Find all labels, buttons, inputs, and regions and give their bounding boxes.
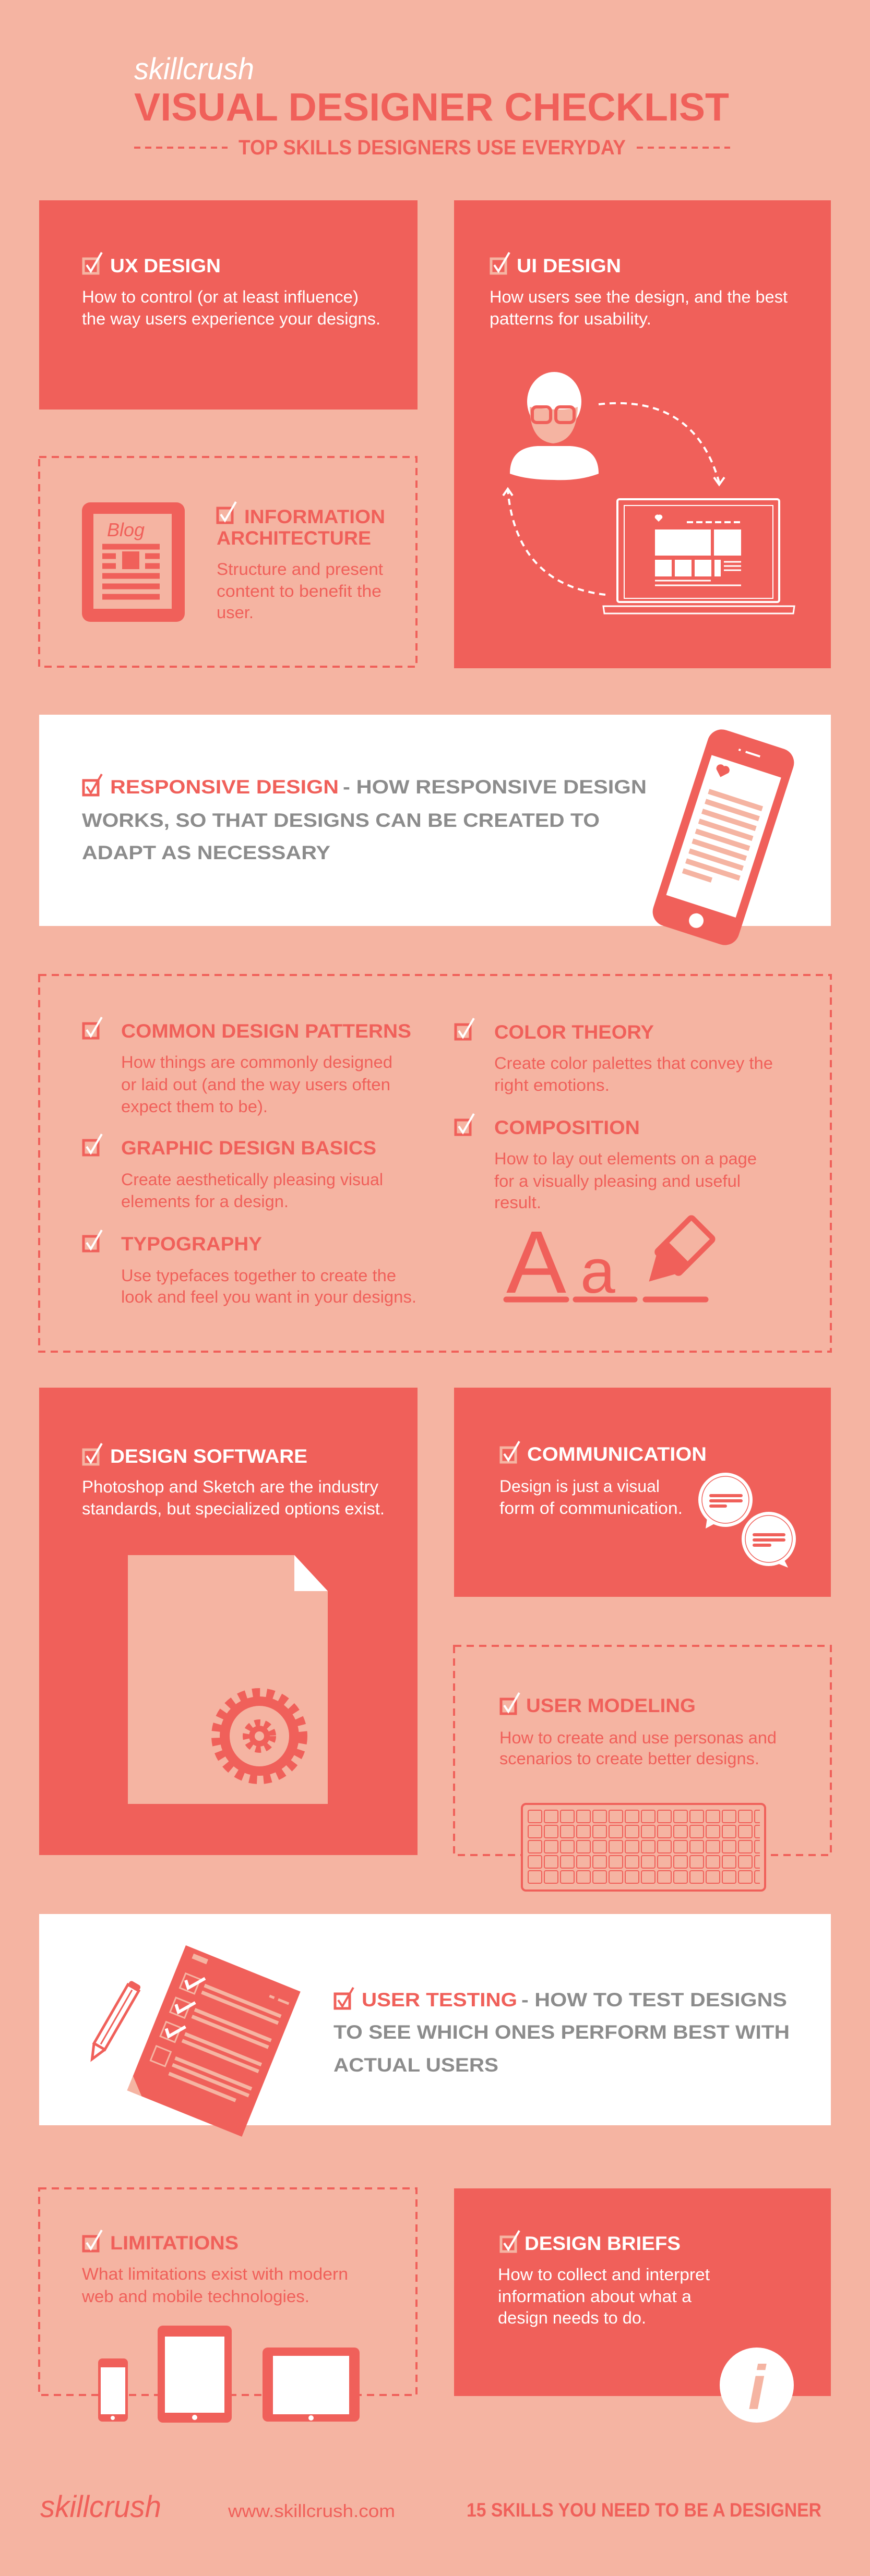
footer [40,2490,821,2524]
icon: typography Aa and marker: a [580,1236,615,1306]
panel: design software: DESIGN SOFTWARE [110,1446,307,1467]
panel: design briefs: How to collect and interpret [498,2265,710,2284]
panel: user modeling: USER MODELING [526,1695,696,1716]
panel: user testing: USER TESTING [362,1989,517,2011]
item: graphic design basics: GRAPHIC DESIGN BASICS [121,1137,376,1159]
icon: info [720,2348,794,2423]
icon: file with gear [128,1555,328,1804]
panel: user modeling: scenarios to create better designs. [499,1749,759,1768]
item: composition: for a visually pleasing and useful [494,1172,741,1190]
item: graphic design basics [84,1134,383,1211]
item: color theory: right emotions. [494,1076,610,1094]
panel: communication [454,1388,831,1597]
panel: UX design [39,200,418,410]
icon: checkbox [491,252,509,273]
item: composition: COMPOSITION [494,1117,640,1138]
panel: UI design: patterns for usability. [490,309,651,328]
panel: information architecture: Structure and present [217,560,383,579]
footer: www.skillcrush.com [228,2501,395,2521]
panel: information architecture: ARCHITECTURE [217,527,371,549]
panel: responsive design [39,715,831,949]
icon: blog tablet [82,502,185,622]
panel: responsive design: ADAPT AS NECESSARY [82,842,330,863]
panel: limitations [39,2188,416,2423]
panel: UI design: UI DESIGN [517,255,621,276]
item: typography: look and feel you want in your designs. [121,1287,416,1306]
item: typography: Use typefaces together to create the [121,1266,396,1285]
icon: pencil [87,1980,141,2062]
item: color theory: COLOR THEORY [494,1021,654,1043]
panel: limitations: web and mobile technologies. [81,2287,309,2306]
icon: devices [98,2326,360,2423]
icon: clipboard checklist [127,1945,301,2137]
panel: user modeling [454,1646,831,1891]
panel: UX design: UX DESIGN [110,255,221,276]
panel: design fundamentals [39,975,831,1352]
icon: checkbox [218,502,236,523]
item: common design patterns: COMMON DESIGN PATTERNS [121,1020,411,1042]
panel: communication: form of communication. [499,1499,683,1518]
panel: information architecture: user. [217,603,254,622]
logo: skillcrush: skillcrush [134,52,254,86]
item: graphic design basics: elements for a design. [121,1192,289,1211]
panel: information architecture: content to benefit the [217,582,382,600]
icon: typography Aa and marker [506,1213,713,1312]
panel: design briefs [454,2188,831,2423]
item: typography [84,1230,416,1306]
panel: limitations: LIMITATIONS [110,2232,239,2254]
icon: info: i [748,2353,767,2423]
panel: user testing [39,1914,831,2137]
item: typography: TYPOGRAPHY [121,1233,262,1255]
panel: user testing: TO SEE WHICH ONES PERFORM BEST WITH [333,2021,790,2043]
icon: person [510,372,599,480]
panel: design software [39,1388,418,1855]
panel: UI design: How users see the design, and the best [490,287,788,306]
icon: blog tablet: Blog [107,519,145,540]
arrow: person to laptop [599,403,724,485]
icon: checkbox [84,774,102,795]
panel: responsive design: - HOW RESPONSIVE DESIGN [343,776,647,798]
footer: 15 SKILLS YOU NEED TO BE A DESIGNER [467,2499,821,2521]
footer: skillcrush [40,2490,161,2524]
panel: design software: Photoshop and Sketch are the industry [82,1477,378,1496]
panel: design software: standards, but specialized options exist. [82,1499,385,1518]
panel: limitations: What limitations exist with modern [82,2265,348,2283]
title: VISUAL DESIGNER CHECKLIST [134,85,729,129]
panel: UI design [454,200,831,668]
item: common design patterns: or laid out (and the way users often [121,1075,390,1094]
item: color theory: Create color palettes that convey the [494,1054,773,1073]
item: composition [456,1114,757,1212]
item: graphic design basics: Create aesthetically pleasing visual [121,1170,383,1189]
panel: design briefs: design needs to do. [498,2308,646,2327]
item: common design patterns [84,1017,411,1116]
panel: communication: COMMUNICATION [527,1443,707,1465]
item: color theory [456,1018,773,1094]
icon: laptop [603,499,794,613]
item: common design patterns: How things are commonly designed [121,1053,392,1072]
arrow: laptop to person [503,489,605,595]
panel: UX design: the way users experience your designs. [82,309,380,328]
panel: user testing: ACTUAL USERS [333,2054,498,2076]
panel: user testing: - HOW TO TEST DESIGNS [521,1989,787,2011]
panel: design briefs: DESIGN BRIEFS [525,2233,681,2254]
panel: responsive design: RESPONSIVE DESIGN [110,776,339,798]
icon: checkbox [84,252,102,273]
item: composition: result. [494,1193,541,1212]
icon: phone [649,726,798,949]
panel: information architecture: INFORMATION [244,506,385,527]
panel: communication: Design is just a visual [499,1477,660,1496]
panel: user modeling: How to create and use personas and [499,1728,777,1747]
icon: keyboard [522,1804,765,1891]
panel: UX design: How to control (or at least influence) [82,287,359,306]
item: composition: How to lay out elements on a page [494,1149,757,1168]
subtitle: TOP SKILLS DESIGNERS USE EVERYDAY [239,136,626,159]
icon: typography Aa and marker: A [506,1213,567,1312]
panel: responsive design: WORKS, SO THAT DESIGNS CAN BE CREATED TO [82,810,600,831]
icon: speech bubbles [698,1473,796,1568]
panel: design briefs: information about what a [498,2287,692,2306]
item: common design patterns: expect them to be). [121,1097,268,1116]
panel: information architecture [39,457,416,667]
